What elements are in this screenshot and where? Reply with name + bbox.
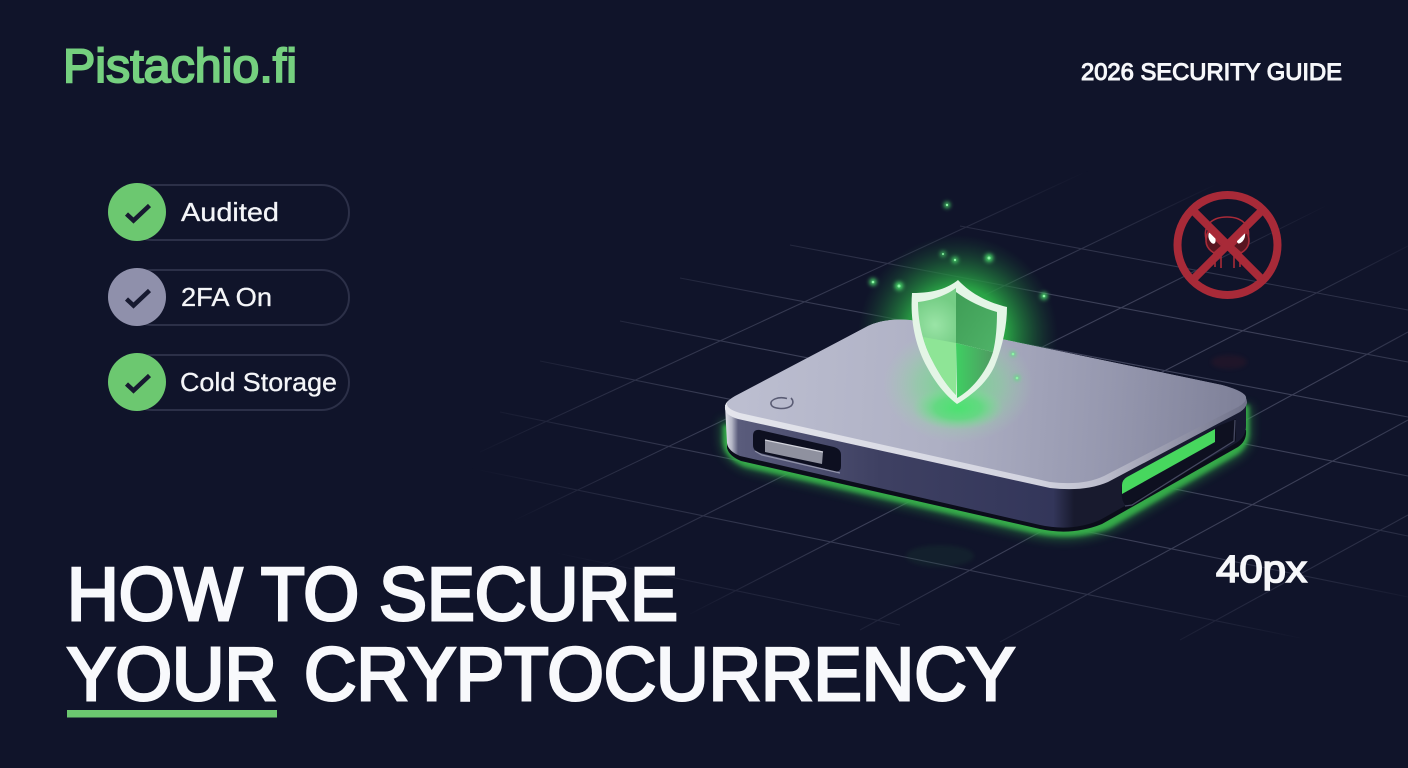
pill: 2FA on — [108, 268, 349, 326]
threat blocked icon — [1178, 195, 1278, 295]
green soft glow — [720, 405, 1252, 540]
top face — [727, 320, 1246, 483]
shield rim — [912, 280, 1007, 404]
prohibition sign — [1178, 195, 1278, 295]
green status slot — [1122, 419, 1236, 506]
shield left lower panel — [923, 337, 956, 395]
main title — [67, 552, 1015, 716]
glowing particles — [870, 202, 1048, 380]
title underline — [67, 710, 277, 718]
title word: your: YOUR — [67, 632, 277, 716]
size annotation: 40px — [1216, 549, 1307, 591]
pill: cold storage — [108, 353, 349, 411]
hacker mask — [1205, 217, 1249, 268]
dark underside — [727, 430, 1246, 532]
perspective floor grid — [503, 188, 1408, 642]
shield right upper panel — [956, 292, 997, 352]
top face rim — [725, 320, 1247, 489]
particle cores — [872, 204, 1045, 379]
particle glows — [870, 202, 1048, 380]
pill: audited — [108, 183, 349, 241]
mask eyes — [1207, 231, 1247, 245]
device body — [725, 400, 1246, 528]
hardware wallet device — [720, 320, 1252, 540]
faint red smudge — [1211, 355, 1247, 369]
pill: audited: Audited — [181, 197, 279, 227]
pill: cold storage: Cold Storage — [180, 367, 337, 397]
security shield — [912, 280, 1007, 404]
shield halo behind device — [858, 235, 1058, 435]
shield left panel — [918, 288, 956, 395]
glow on device top — [883, 327, 1033, 443]
usb port — [753, 430, 841, 473]
green under-edge — [723, 405, 1249, 537]
guide label: 2026 SECURITY GUIDE — [1081, 59, 1342, 86]
shield base glow — [912, 386, 1004, 430]
title line one: HOW TO SECURE — [67, 552, 678, 636]
status pills — [108, 183, 349, 411]
faint green floor reflection — [906, 545, 974, 567]
title word: cryptocurrency: CRYPTOCURRENCY — [304, 632, 1015, 716]
shield right lower panel — [956, 343, 993, 398]
pill: 2FA on: 2FA On — [181, 282, 272, 312]
power icon — [771, 398, 793, 408]
brand logo: Pistachio.fi — [63, 39, 297, 92]
